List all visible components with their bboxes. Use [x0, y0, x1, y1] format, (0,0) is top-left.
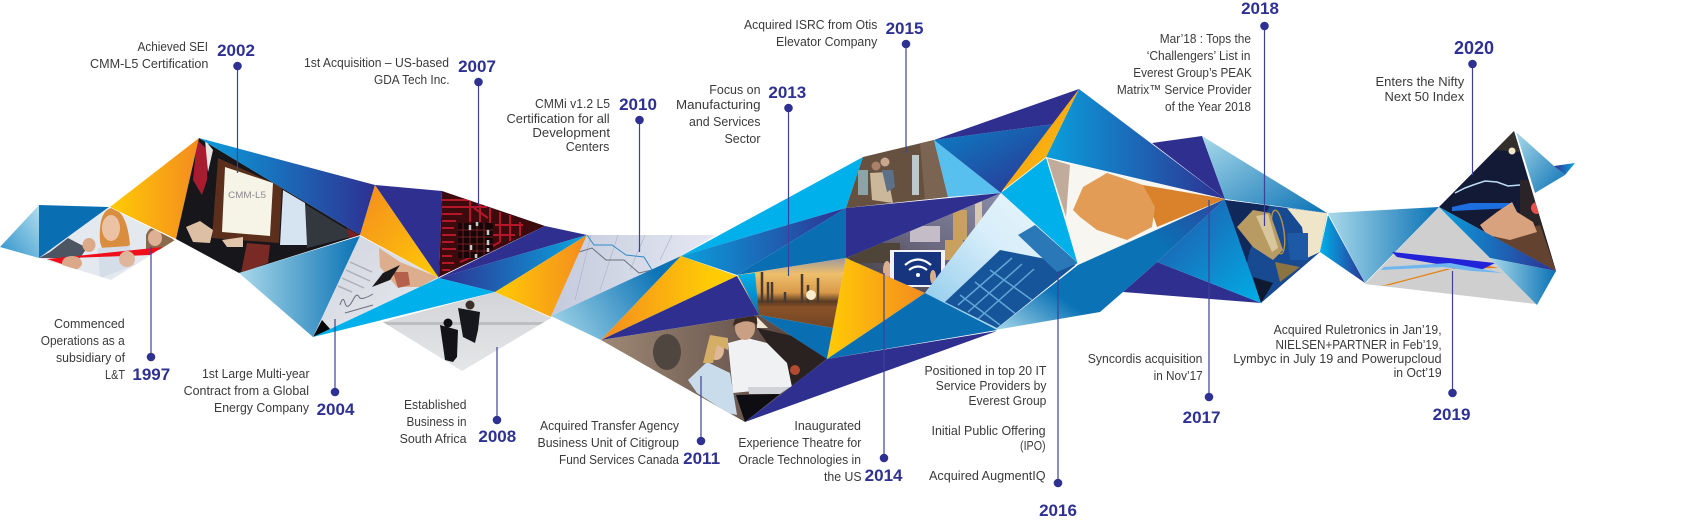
photo: handshake	[1047, 158, 1225, 265]
photo: hand signing a contract	[313, 236, 438, 337]
milestone 1997: Operations as a	[41, 333, 125, 348]
milestone 2002: CMM-L5 Certification	[90, 56, 208, 71]
facet: navy upper triangle right	[1152, 136, 1225, 199]
milestone 2016: Everest Group	[968, 393, 1046, 408]
milestone 2015: Elevator Company	[776, 34, 878, 49]
milestone 1997: 1997	[132, 365, 170, 384]
facet: orange triangle two	[360, 185, 439, 278]
milestone 2014: the US	[824, 469, 862, 484]
milestone 2016: Initial Public Offering	[932, 423, 1046, 438]
photo: business team with laptop	[601, 315, 827, 422]
facet: blue triangle two	[759, 315, 833, 359]
milestone 2008: Established	[404, 397, 466, 412]
photo: CMM-L5 certificate	[170, 135, 365, 275]
milestone 2014: Experience Theatre for	[738, 435, 862, 450]
milestone 2004: Energy Company	[214, 400, 309, 415]
milestone 2014: Inaugurated	[794, 418, 861, 433]
milestone 2017: Syncordis acquisition	[1088, 351, 1202, 366]
milestone 2010: CMMi v1.2 L5	[535, 96, 610, 111]
milestone 2016: Positioned in top 20 IT	[924, 363, 1046, 378]
photo: stock chart lines	[551, 235, 716, 316]
facet: blue triangle under building	[827, 293, 997, 359]
milestone 2007: 1st Acquisition – US-based	[304, 55, 449, 70]
facet: blue triangle	[737, 208, 846, 275]
milestone 2002	[90, 39, 255, 173]
milestone 2008	[400, 347, 516, 446]
photo: CMM-L5 certificate: CMM-L5	[228, 190, 266, 200]
facet: navy band under trader photo	[1439, 207, 1556, 271]
milestone 2013: and Services	[689, 114, 761, 129]
facet: navy to cyan triangle	[1157, 199, 1261, 303]
milestone 2016: (IPO)	[1020, 438, 1046, 453]
facet: navy lower wedge	[745, 331, 997, 422]
milestone 2019: NIELSEN+PARTNER in Feb’19,	[1276, 337, 1442, 352]
facet: cyan triangle two	[1001, 158, 1078, 263]
milestone 2018: Everest Group’s PEAK	[1133, 65, 1252, 80]
milestone 2013: 2013	[768, 83, 806, 102]
facet: light gradient triangle	[1202, 136, 1327, 213]
milestone 2019: Acquired Ruletronics in Jan’19,	[1274, 322, 1442, 337]
milestone 2011: 2011	[683, 449, 720, 468]
milestone 2017: 2017	[1183, 408, 1221, 427]
milestone 2018: Matrix™ Service Provider	[1117, 82, 1252, 97]
milestone 2004: Contract from a Global	[184, 383, 309, 398]
milestone 1997: L&T	[105, 367, 125, 382]
photo: refinery at sunset	[737, 258, 846, 328]
milestone 2004	[184, 319, 355, 419]
photo: golden trophy	[1225, 200, 1327, 303]
facet: navy lower wedge right	[1123, 262, 1261, 303]
facet: yellow-orange triangle four	[827, 258, 925, 359]
milestone 2008: South Africa	[400, 431, 467, 446]
milestone 2017	[1088, 200, 1221, 427]
milestone 2015: Acquired ISRC from Otis	[744, 17, 878, 32]
milestone 2014: Oracle Technologies in	[738, 452, 861, 467]
milestone 2016: 2016	[1039, 501, 1077, 520]
milestone 2016: Acquired AugmentIQ	[929, 468, 1046, 483]
facet: cyan to navy band	[681, 208, 846, 275]
milestone 2014: 2014	[865, 466, 903, 485]
milestone 2016: Service Providers by	[936, 378, 1047, 393]
milestone 2013: Sector	[724, 131, 761, 146]
milestone 2015	[744, 17, 923, 153]
facet: navy sliver	[439, 226, 587, 278]
milestone 1997: subsidiary of	[56, 350, 125, 365]
facet: cyan triangle	[681, 157, 863, 256]
milestone 2002: 2002	[217, 41, 255, 60]
milestone 2007: 2007	[458, 57, 496, 76]
facet: blue band above certificate	[199, 138, 375, 235]
milestone 2016	[924, 272, 1077, 520]
milestone 1997	[41, 247, 170, 384]
milestone 2011	[538, 376, 720, 468]
facet: yellow-orange triangle	[495, 235, 587, 317]
facet: navy top sliver	[934, 89, 1079, 140]
facet: orange triangle	[110, 138, 199, 239]
milestone 2008: 2008	[478, 427, 516, 446]
photo: tablet with wifi icon	[845, 190, 1005, 295]
facet: navy band	[846, 193, 1001, 258]
milestone 2013	[676, 82, 806, 276]
facet: light to blue triangle	[1328, 207, 1439, 283]
photo: people cutting red ribbon	[39, 207, 174, 280]
milestone 2004: 2004	[317, 400, 355, 419]
milestone 2019: Lymbyc in July 19 and Powerupcloud	[1233, 351, 1442, 366]
milestone 2018: of the Year 2018	[1165, 99, 1251, 114]
milestone 2011: Fund Services Canada	[559, 452, 680, 467]
facet: navy to cyan band	[439, 235, 587, 292]
facet: light-blue triangle	[239, 236, 360, 337]
facet: cyan corner by refinery	[738, 273, 759, 315]
milestone 2017: in Nov’17	[1154, 368, 1203, 383]
facet: grey triangle with coloured streaks	[1365, 207, 1536, 304]
milestone 2020: 2020	[1454, 38, 1494, 58]
milestone 2015: 2015	[886, 19, 923, 38]
milestone 2008: Business in	[406, 414, 466, 429]
milestone 2007: GDA Tech Inc.	[374, 72, 450, 87]
milestone 2002: Achieved SEI	[138, 39, 208, 54]
milestone 2010	[506, 95, 657, 252]
milestone 2013: Manufacturing	[676, 97, 760, 112]
milestone 2018: Mar’18 : Tops the	[1160, 31, 1251, 46]
photo: glass skyscraper	[925, 193, 1078, 330]
facet: light-blue band	[551, 256, 681, 340]
facet: blue top right band	[1046, 89, 1225, 199]
milestone 2019: in Oct’19	[1394, 365, 1442, 380]
milestone 2004: 1st Large Multi-year	[202, 366, 310, 381]
facet: navy triangle two	[601, 276, 759, 340]
milestone 2010: Development	[532, 125, 610, 140]
milestone 2019: 2019	[1433, 405, 1470, 424]
facet: cyan sliver	[313, 278, 495, 337]
facet: sky-blue triangle	[934, 140, 1001, 197]
facet: blue triangle lower right	[1490, 258, 1556, 305]
milestone 2010: 2010	[619, 95, 657, 114]
facet: cyan to navy triangle	[1320, 215, 1365, 283]
photo: red circuit board	[439, 191, 545, 277]
facet: yellow-orange triangle three	[601, 256, 737, 340]
milestone 2013: Focus on	[709, 82, 760, 97]
photo: trader hand on stock screens	[1439, 131, 1556, 271]
facet: tail tip	[1554, 163, 1575, 175]
facet: blue band below handshake	[995, 199, 1225, 330]
milestone 2010: Certification for all	[506, 111, 610, 126]
photo: business handshake on grey floor	[383, 292, 551, 371]
milestone 2010: Centers	[566, 139, 610, 154]
milestone 2020: Next 50 Index	[1384, 89, 1465, 104]
facet: left blue triangle	[39, 205, 109, 258]
facet: orange sliver	[1001, 89, 1079, 192]
milestone 2020: Enters the Nifty	[1376, 74, 1465, 89]
milestone 1997: Commenced	[54, 316, 125, 331]
milestone 2018: ‘Challengers’ List in	[1147, 48, 1250, 63]
facet: blue to navy triangle	[934, 124, 1054, 193]
facet: blue tail at far right	[1516, 132, 1565, 193]
milestone 2011: Acquired Transfer Agency	[540, 418, 679, 433]
milestone 2014	[738, 273, 903, 485]
photo: colleagues in a library	[845, 138, 950, 210]
milestone 2007	[304, 55, 496, 205]
milestone 2011: Business Unit of Citigroup	[538, 435, 679, 450]
milestone 2019	[1233, 271, 1470, 424]
milestone 2020	[1376, 38, 1494, 175]
milestone 2018	[1117, 0, 1279, 226]
geometric ribbon with photo facets	[0, 89, 1575, 425]
facet: navy triangle	[375, 185, 442, 278]
facet: left light-blue triangle	[0, 205, 39, 258]
